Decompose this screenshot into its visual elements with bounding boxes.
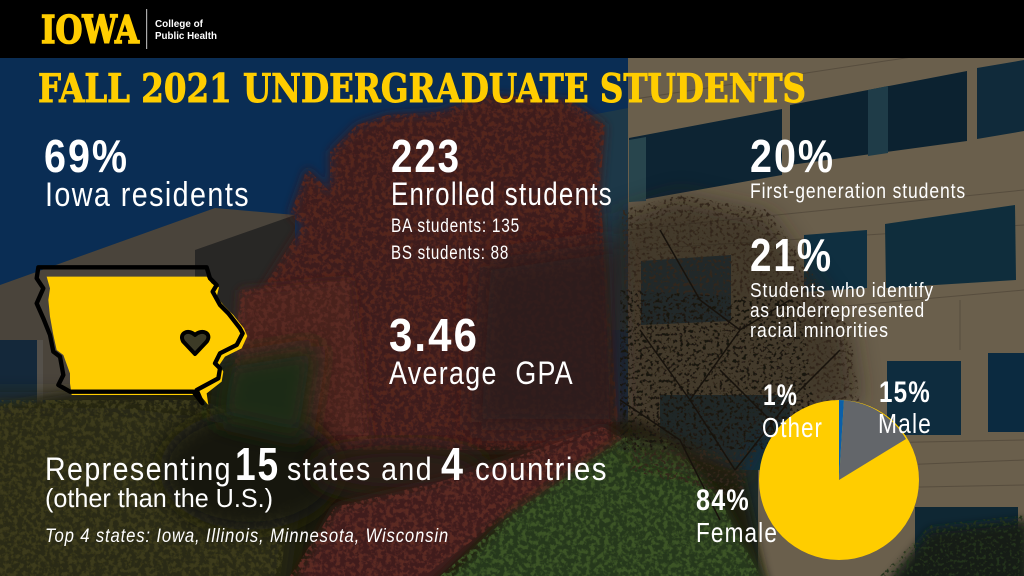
stat: enrolled students: Enrolled students xyxy=(391,176,613,212)
stat: Iowa residents: 69% xyxy=(44,130,129,182)
label: other xyxy=(762,379,823,443)
stat: enrolled students: BA students: 135 xyxy=(391,216,520,237)
stat: average GPA: 3.46 xyxy=(389,309,479,361)
label: female: 84% xyxy=(696,484,750,517)
title: FALL 2021 UNDERGRADUATE STUDENTS xyxy=(38,66,806,112)
stat: underrepresented minorities xyxy=(750,229,934,342)
stat: first-generation: First-generation students xyxy=(750,180,966,203)
icon: Iowa map with heart xyxy=(37,267,247,405)
right building xyxy=(628,58,1024,576)
pie chart: gender xyxy=(696,376,932,560)
stat: states and countries xyxy=(45,438,608,547)
stat: enrolled students: 223 xyxy=(391,130,461,182)
stat: Iowa residents: Iowa residents xyxy=(45,176,250,214)
dark band between trees xyxy=(310,445,490,495)
stat: states and countries: Representing xyxy=(45,451,232,487)
red shrub xyxy=(290,427,625,576)
icon: heart xyxy=(182,332,208,354)
label: male: 15% xyxy=(879,376,931,409)
Iowa wordmark: IOWA xyxy=(41,7,139,52)
stat: states and countries: states and xyxy=(287,451,433,487)
stat: states and countries: 4 xyxy=(441,438,465,490)
label: male xyxy=(878,376,932,439)
college name: College of xyxy=(155,19,204,30)
stat: states and countries: Top 4 states: Iowa, Illinois, Minnesota, Wisconsin xyxy=(45,526,449,547)
lower left foliage speckle xyxy=(0,400,300,576)
stat: states and countries: (other than the U.S.) xyxy=(45,483,273,513)
stat: average GPA: Average GPA xyxy=(389,355,574,391)
green tree xyxy=(440,437,770,576)
header bar xyxy=(0,0,1024,58)
stat: enrolled students xyxy=(391,130,613,264)
bare tree over building xyxy=(615,195,860,480)
stat: Iowa residents xyxy=(44,130,250,214)
glass building xyxy=(575,108,628,330)
college name: Public Health xyxy=(155,31,217,42)
stat: enrolled students: BS students: 88 xyxy=(391,243,509,264)
stat: underrepresented minorities: as underrepresented xyxy=(750,300,925,322)
stat: underrepresented minorities: 21% xyxy=(750,229,833,281)
dark tree bottom right xyxy=(880,520,1024,576)
label: other: 1% xyxy=(763,379,798,412)
stat: underrepresented minorities: racial minorities xyxy=(750,320,889,342)
label: other: Other xyxy=(762,412,823,443)
stat: states and countries: countries xyxy=(475,451,608,487)
stat: underrepresented minorities: Students who identify xyxy=(750,280,934,302)
stat: states and countries: 15 xyxy=(235,438,280,490)
label: female: Female xyxy=(696,517,778,548)
stat: average GPA xyxy=(389,309,574,391)
red tree canopy xyxy=(255,95,618,450)
stat: first-generation: 20% xyxy=(750,130,835,182)
lower dark foliage base xyxy=(0,350,770,576)
label: male: Male xyxy=(878,408,932,439)
stat: first-generation xyxy=(750,130,966,203)
label: female xyxy=(696,484,778,548)
left building xyxy=(0,208,295,400)
